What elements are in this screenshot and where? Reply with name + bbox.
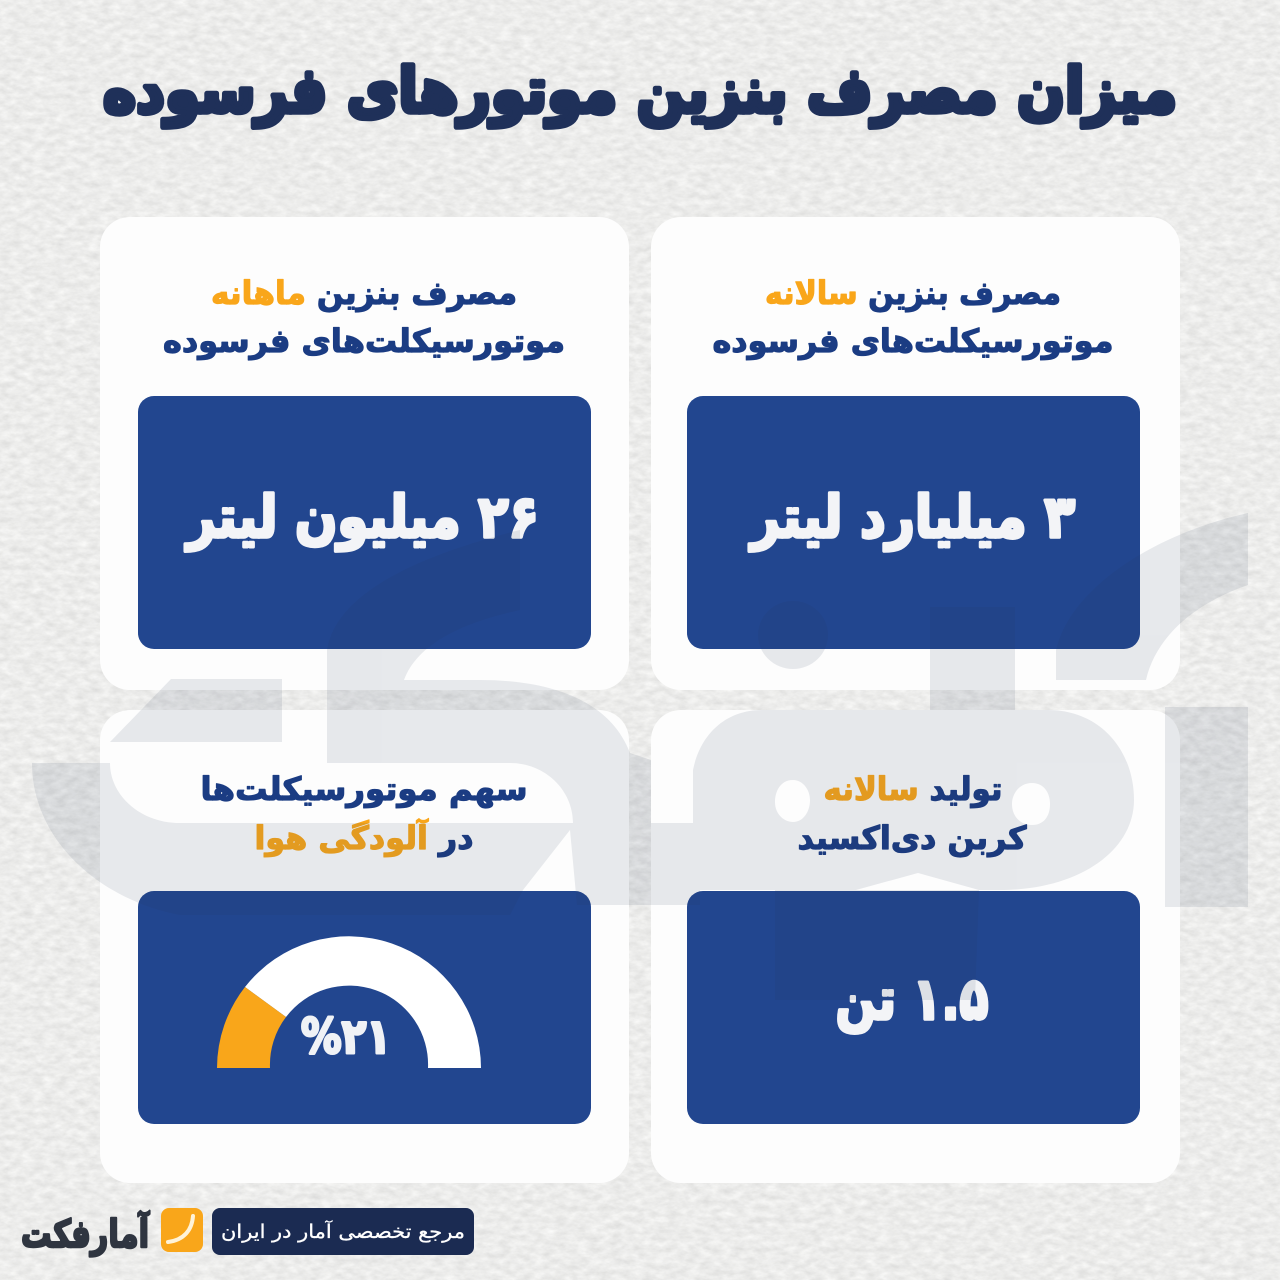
value box: gauge chart 21 percent [138, 891, 591, 1124]
heading: annual consumption: مصرف بنزین سالانه [765, 274, 1061, 312]
panel: annual carbon dioxide production [651, 710, 1180, 1183]
panel: motorcycles share of air pollution [100, 710, 629, 1183]
value box: 26 million liters: ۲۶ میلیون لیتر [184, 483, 539, 552]
heading: motorcycles share: سهم موتورسیکلت‌ها [200, 770, 528, 808]
heading: monthly consumption: مصرف بنزین ماهانه [211, 274, 517, 312]
footer: source tagline [212, 1208, 474, 1255]
gauge track [245, 936, 481, 1068]
background watermark shapes [32, 513, 1248, 1000]
footer: source tagline: مرجع تخصصی آمار در ایران [221, 1219, 465, 1243]
subheading: carbon dioxide: کربن دی‌اکسید [798, 819, 1027, 857]
title: میزان مصرف بنزین موتورهای فرسوده [103, 54, 1177, 127]
subheading: worn-out motorcycles: موتورسیکلت‌های فرسوده [163, 322, 565, 360]
value box: 1.5 tons [687, 891, 1140, 1124]
subheading: worn-out motorcycles: موتورسیکلت‌های فرسوده [712, 322, 1114, 360]
value box: 3 billion liters [687, 396, 1140, 649]
panel: annual gasoline consumption [651, 217, 1180, 690]
subheading: in air pollution: در آلودگی هوا [254, 818, 474, 857]
value box: 1.5 tons: ۱.۵ تن [836, 965, 988, 1034]
value box: 26 million liters [138, 396, 591, 649]
footer: brand name: آمارفکت [21, 1210, 150, 1256]
heading: annual production: تولید سالانه [824, 770, 1002, 808]
footer: logo icon [161, 1208, 203, 1252]
gauge value: %۲۱ [301, 1009, 391, 1065]
gauge filled segment [217, 987, 286, 1068]
panel: monthly gasoline consumption [100, 217, 629, 690]
value box: 3 billion liters: ۳ میلیارد لیتر [748, 483, 1075, 552]
